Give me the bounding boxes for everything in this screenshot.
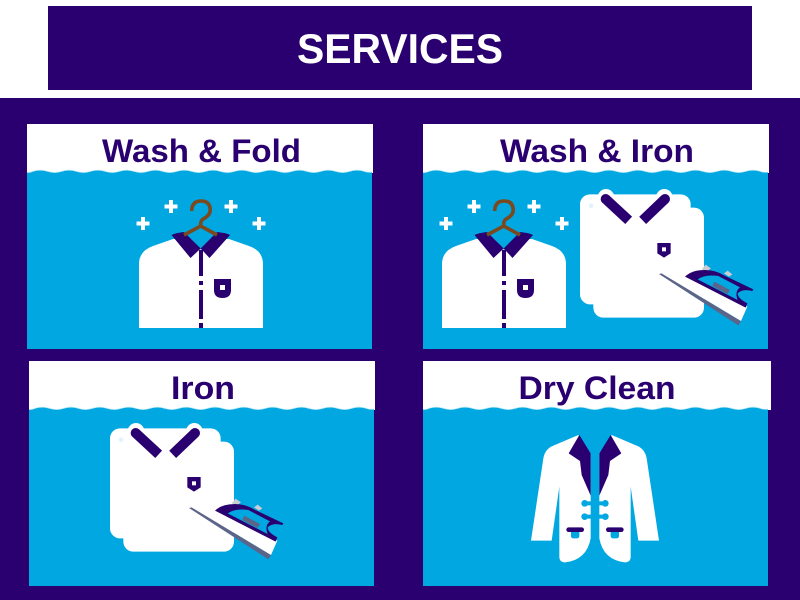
icon: shirt on hanger — [136, 200, 266, 328]
heading: Dry Clean: Dry Clean — [518, 370, 676, 406]
panel: Dry Clean — [423, 361, 771, 586]
heading: Wash & Iron: Wash & Iron — [500, 133, 694, 169]
panel: Iron — [29, 361, 375, 586]
heading: Iron: Iron — [171, 370, 235, 406]
panel: Wash & Iron — [423, 124, 769, 349]
icon: shirt on hanger — [440, 200, 568, 328]
heading: Wash & Fold: Wash & Fold — [102, 133, 301, 169]
icon: folded shirt with iron — [580, 189, 753, 325]
icon: dry-clean jacket — [531, 435, 659, 562]
header banner — [48, 6, 752, 90]
icon: folded shirt with iron — [110, 423, 283, 559]
title: SERVICES — [297, 25, 503, 72]
panel: Wash & Fold — [27, 124, 373, 349]
